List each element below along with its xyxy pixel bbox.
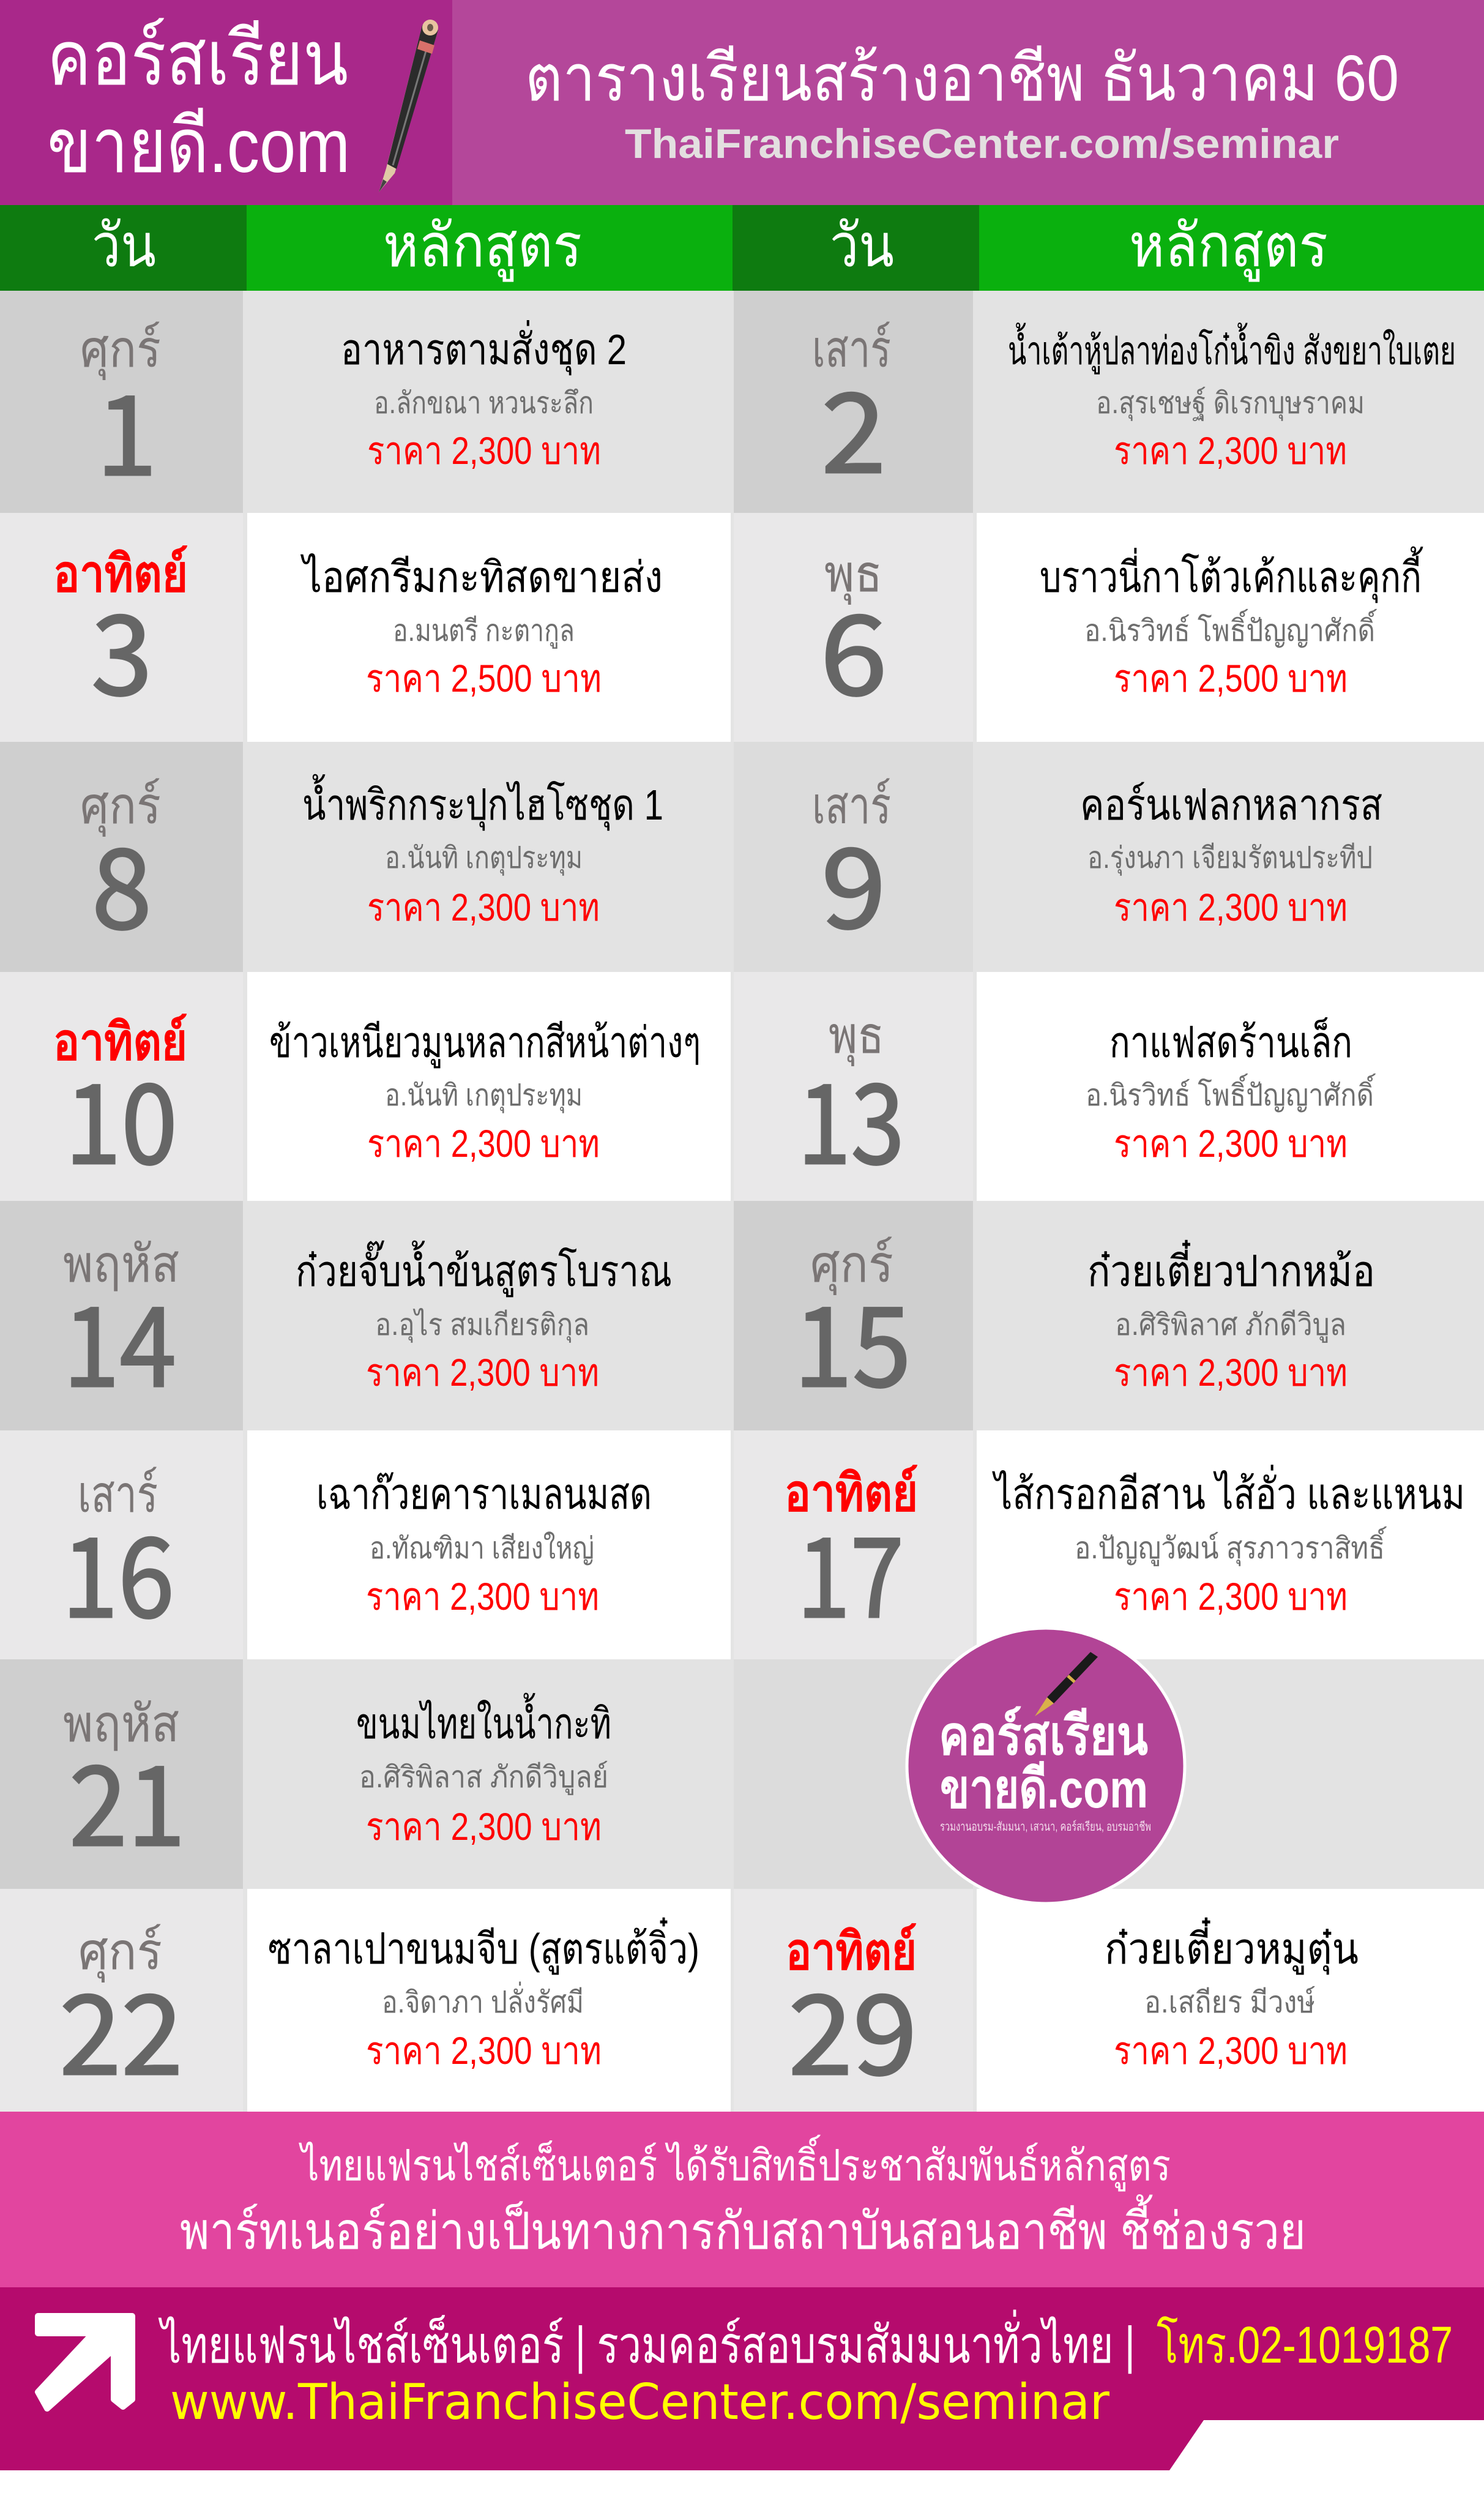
course: Thai desserts: อ.ศิริพิลาส ภักดีวิบูลย์ (359, 1760, 608, 1795)
header: title panel (452, 0, 1484, 205)
badge: circular logo: คอร์สเรียน (939, 1705, 1148, 1766)
day: Sunday 17: อาทิตย์ (785, 1464, 918, 1522)
day: Saturday 16: เสาร์ (78, 1465, 158, 1523)
course: sausage: ราคา 2,300 บาท (1114, 1575, 1348, 1618)
day: Friday 22: 22 (59, 1946, 183, 2106)
footer: magenta contact band (0, 2287, 1484, 2470)
day: Wednesday 13: 13 (797, 1036, 904, 1195)
course: cornflakes: คอร์นเฟลกหลากรส (1080, 781, 1382, 829)
course: salapao: ราคา 2,300 บาท (366, 2030, 602, 2072)
day: Sunday 29: 29 (788, 1946, 917, 2106)
course: cornflakes: ราคา 2,300 บาท (1114, 886, 1348, 929)
footer: pink partner banner (0, 2112, 1484, 2287)
course: Food to order set 2: อาหารตามสั่งชุด 2 (341, 320, 627, 376)
course: ice cream (300, 553, 663, 700)
course: stewed pork noodles: ราคา 2,300 บาท (1114, 2030, 1348, 2072)
row backgrounds (0, 291, 1484, 2112)
header: title panel: ตารางเรียนสร้างอาชีพ ธันวาคม 60 (525, 42, 1399, 114)
course: noodles: อ.ศิริพิลาศ ภักดีวิบูล (1115, 1309, 1346, 1343)
course: sausage (992, 1465, 1465, 1618)
course: caramel: เฉาก๊วยคาราเมลนมสด (316, 1470, 652, 1518)
table header row: หลักสูตร (383, 212, 582, 282)
course: ice cream: ราคา 2,500 บาท (366, 657, 602, 700)
day: Saturday 9: 9 (821, 800, 886, 960)
course: ice cream: ไอศกรีมกะทิสดขายส่ง (300, 553, 663, 601)
course: tofu fish drink: ราคา 2,300 บาท (1114, 430, 1347, 473)
day: Sunday 10: อาทิตย์ (53, 1013, 187, 1071)
course: rolled noodles (296, 1240, 672, 1394)
website url: www.ThaiFranchiseCenter.com/seminar (170, 2374, 1109, 2431)
course: sticky rice: ราคา 2,300 บาท (367, 1123, 600, 1165)
day: Friday 22: ศุกร์ (78, 1923, 162, 1983)
day: Thursday 14: 14 (63, 1258, 176, 1418)
course: stewed pork noodles (1105, 1918, 1359, 2072)
course: small coffee shop (1086, 1017, 1376, 1165)
icon: pencil (379, 20, 438, 192)
day: Sunday 29: อาทิตย์ (786, 1923, 917, 1980)
day: Wednesday 6: พุธ (824, 545, 882, 605)
table header row: วัน (92, 212, 156, 279)
day: Friday 15: ศุกร์ (810, 1235, 893, 1296)
day: Saturday 2: 2 (821, 345, 886, 504)
course: chilli paste (302, 774, 663, 929)
day: Sunday 3: อาทิตย์ (53, 545, 188, 602)
header: logo panel: คอร์สเรียน (47, 17, 348, 101)
day: Friday 1: ศุกร์ (80, 320, 161, 381)
course: rolled noodles: ราคา 2,300 บาท (366, 1351, 599, 1394)
course: cornflakes: อ.รุ่งนภา เจียมรัตนประทีป (1087, 842, 1373, 876)
day: Friday 15: 15 (794, 1258, 911, 1418)
course: Thai desserts: ราคา 2,300 บาท (366, 1806, 602, 1848)
course: stewed pork noodles: อ.เสถียร มีวงษ์ (1144, 1986, 1315, 2019)
course: noodles: ก๋วยเตี๋ยวปากหม้อ (1087, 1240, 1375, 1295)
day: Sunday 3: 3 (91, 567, 152, 727)
course: salapao (268, 1918, 699, 2072)
course: sticky rice (269, 1018, 701, 1165)
day: Saturday 2: เสาร์ (812, 320, 891, 378)
day: Thursday 21: พฤหัส (63, 1695, 179, 1752)
header: logo panel: ขายดี.com (47, 104, 350, 189)
day: Sunday 10: 10 (65, 1036, 177, 1195)
table header row: หลักสูตร (1129, 212, 1328, 282)
day: Sunday 3 (53, 545, 188, 727)
course: tofu fish drink: อ.สุรเชษฐ์ ดิเรกบุษราคม (1096, 386, 1365, 421)
course: chilli paste: อ.นันทิ เกตุประทุม (385, 842, 583, 876)
course: noodles: ราคา 2,300 บาท (1114, 1351, 1348, 1394)
day: Saturday 16: 16 (62, 1489, 174, 1649)
course: salapao: อ.จิดาภา ปลั่งรัศมี (382, 1981, 584, 2019)
course: brownie: อ.นิรวิทธ์ โพธิ์ปัญญาศักดิ์ (1084, 608, 1377, 648)
course: sausage: อ.ปัญญูวัฒน์ สุรภาวราสิทธิ์ (1075, 1526, 1387, 1566)
course: Food to order set 2: ราคา 2,300 บาท (367, 430, 601, 473)
badge: circular logo (907, 1628, 1185, 1904)
day: Thursday 14: พฤหัส (63, 1235, 179, 1293)
day: Friday 1 (80, 320, 161, 507)
course: brownie: ราคา 2,500 บาท (1114, 657, 1348, 700)
course: caramel: ราคา 2,300 บาท (366, 1575, 599, 1618)
table header row: วัน (830, 212, 894, 279)
table header row (0, 205, 1484, 291)
course: chilli paste: ราคา 2,300 บาท (367, 886, 600, 929)
course: stewed pork noodles: ก๋วยเตี๋ยวหมูตุ๋น (1105, 1918, 1359, 1975)
day: Friday 8: ศุกร์ (80, 777, 161, 837)
day: Saturday 9 (812, 777, 891, 960)
icon: arrow (38, 2316, 132, 2408)
course: ice cream: อ.มนตรี กะตากูล (393, 615, 575, 649)
header: logo panel (0, 0, 452, 205)
day: Saturday 9: เสาร์ (812, 777, 891, 834)
course: small coffee shop: อ.นิรวิทธ์ โพธิ์ปัญญาศักดิ์ (1086, 1073, 1376, 1112)
course: salapao: ซาลาเปาขนมจีบ (สูตรแต้จิ๋ว) (268, 1918, 699, 1975)
course: cornflakes (1080, 781, 1382, 929)
day: Friday 8: 8 (92, 801, 152, 960)
course: rolled noodles: อ.อุไร สมเกียรติกุล (375, 1307, 589, 1343)
badge: circular logo: รวมงานอบรม-สัมมนา, เสวนา, คอร์สเรียน, อบรมอาชีพ (940, 1820, 1151, 1834)
course: caramel (316, 1470, 652, 1618)
icon: fountain pen (1035, 1652, 1098, 1716)
course: Thai desserts: ขนมไทยในน้ำกะทิ (356, 1692, 611, 1747)
course: Food to order set 2: อ.ลักขณา หวนระลึก (374, 387, 594, 420)
day: Wednesday 6: 6 (820, 567, 887, 727)
day: Friday 8 (80, 777, 161, 960)
course: rolled noodles: ก๋วยจั๊บน้ำข้นสูตรโบราณ (296, 1240, 672, 1298)
day: Thursday 21: 21 (69, 1717, 185, 1877)
course: Thai desserts (356, 1692, 611, 1848)
contact line: ไทยแฟรนไชส์เซ็นเตอร์ | รวมคอร์สอบรมสัมมนาทั่วไทย | (158, 2309, 1135, 2374)
footer: pink partner banner: ไทยแฟรนไชส์เซ็นเตอร์ ได้รับสิทธิ์ประชาสัมพันธ์หลักสูตร (299, 2135, 1171, 2192)
day: Sunday 17: 17 (797, 1489, 904, 1649)
course: small coffee shop: ราคา 2,300 บาท (1114, 1123, 1348, 1165)
course: brownie (1040, 546, 1423, 700)
course: sticky rice: ข้าวเหนียวมูนหลากสีหน้าต่างๆ (269, 1018, 701, 1069)
course: Food to order set 2 (341, 320, 627, 473)
course: chilli paste: น้ำพริกกระปุกไฮโซชุด 1 (302, 774, 663, 831)
course: noodles (1087, 1240, 1375, 1394)
day: Wednesday 13: พุธ (829, 1006, 884, 1067)
day: Saturday 2 (812, 320, 891, 504)
badge: circular logo: ขายดี.com (940, 1758, 1148, 1819)
course: small coffee shop: กาแฟสดร้านเล็ก (1109, 1017, 1352, 1066)
course: tofu fish drink (1008, 323, 1456, 473)
day: Friday 1: 1 (96, 347, 157, 507)
header: title panel: ThaiFranchiseCenter.com/seminar (625, 121, 1339, 167)
course: caramel: อ.ทัณฑิมา เสียงใหญ่ (370, 1531, 594, 1565)
course: sticky rice: อ.นันทิ เกตุประทุม (385, 1079, 583, 1113)
footer: pink partner banner: พาร์ทเนอร์อย่างเป็นทางการกับสถาบันสอนอาชีพ ชี้ช่องรวย (180, 2194, 1306, 2260)
